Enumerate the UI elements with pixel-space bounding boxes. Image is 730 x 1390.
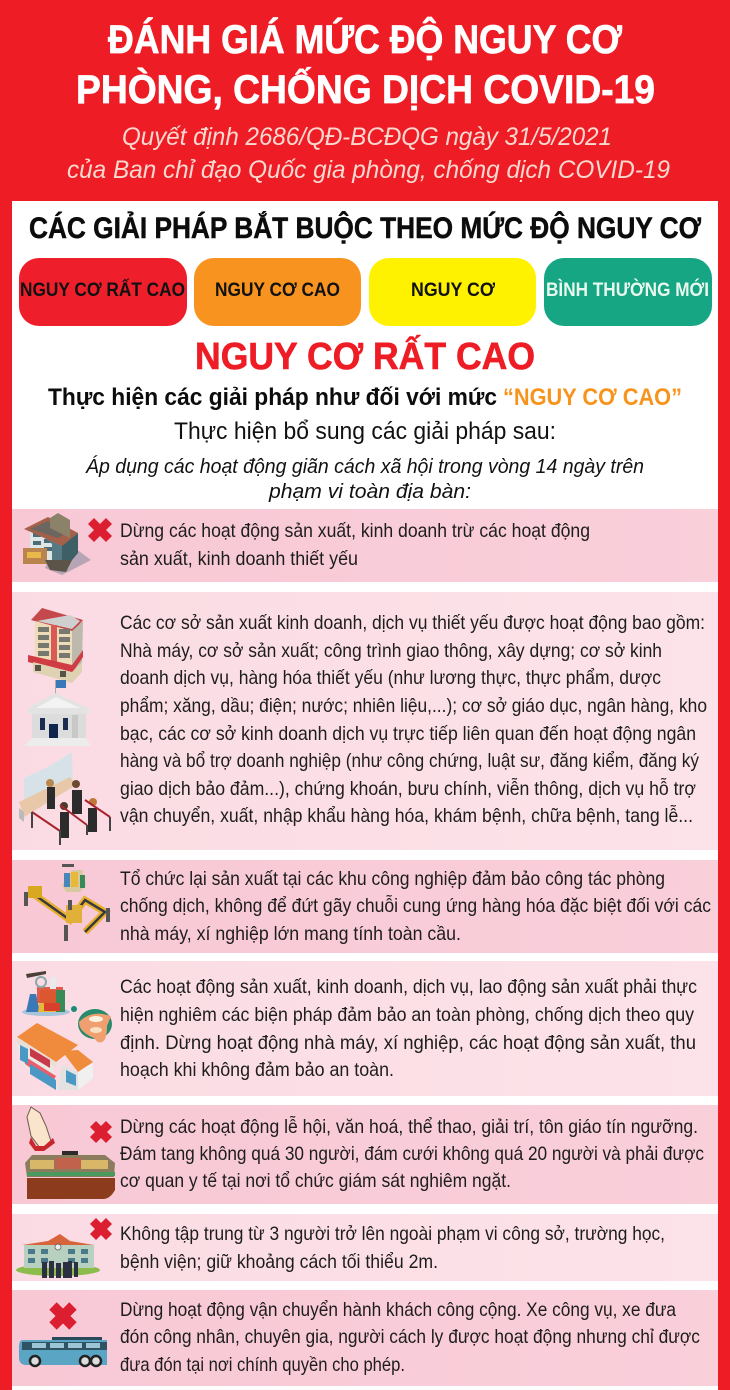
pill: risk: NGUY CƠ (411, 280, 496, 301)
pill: high risk: NGUY CƠ CAO (215, 280, 340, 301)
risk level pills (19, 258, 712, 326)
pill: new normal (544, 258, 712, 326)
panel: stop production (12, 509, 718, 582)
icon: red cross (53, 1306, 73, 1326)
body text: bệnh viện; giữ khoảng cách tối thiểu 2m. (120, 1251, 438, 1273)
body text: Dừng hoạt động vận chuyển hành khách công cộng. Xe công vụ, xe đưa (120, 1299, 676, 1321)
body text: hoạch khi không đảm bảo an toàn. (120, 1059, 394, 1081)
icon: building (23, 513, 91, 575)
body text: định. Dừng hoạt động nhà máy, xí nghiệp, các hoạt động sản xuất, thu (120, 1032, 696, 1054)
icon: bank (24, 680, 91, 746)
body text: đưa đón tại nơi chính quyền cho phép. (120, 1354, 405, 1376)
panel: stop festivals (12, 1105, 718, 1204)
body text (120, 976, 697, 1081)
level heading: NGUY CƠ RẤT CAO (195, 334, 535, 378)
body text: Tổ chức lại sản xuất tại các khu công nghiệp đảm bảo công tác phòng (120, 868, 665, 890)
pill: very high risk: NGUY CƠ RẤT CAO (20, 279, 185, 301)
instruction line: “NGUY CƠ CAO” (503, 384, 682, 411)
pill: very high risk (19, 258, 187, 326)
pill: risk (369, 258, 536, 326)
subtitle (67, 123, 670, 184)
body text (120, 520, 590, 570)
body text: nhà máy, xí nghiệp lớn mang tính toàn cầu. (120, 923, 461, 945)
italic note (85, 455, 644, 503)
body text: Nhà máy, cơ sở sản xuất; công trình giao thông, xây dựng; cơ sở kinh (120, 640, 662, 662)
icon: stadium with praying hands (25, 1107, 115, 1199)
icon: bus (19, 1337, 107, 1366)
icon: red cross (91, 521, 109, 539)
subtitle: của Ban chỉ đạo Quốc gia phòng, chống dịch COVID-19 (67, 156, 670, 184)
icon: washing hands (71, 1006, 112, 1042)
body text (120, 1299, 700, 1376)
supplementary line: Thực hiện bổ sung các giải pháp sau: (174, 418, 556, 445)
body text: cơ quan y tế tại nơi tổ chức giám sát nghiêm ngặt. (120, 1170, 511, 1192)
icon: service counter (19, 752, 110, 845)
pill: high risk (194, 258, 361, 326)
panel: no gatherings (12, 1214, 718, 1281)
body text: Dừng các hoạt động sản xuất, kinh doanh trừ các hoạt động (120, 520, 590, 542)
body text (120, 868, 711, 945)
body text (120, 1115, 704, 1192)
body text: doanh dịch vụ, hàng hóa thiết yếu (như lương thực, thực phẩm, dược (120, 667, 661, 689)
panel: essential establishments (12, 592, 718, 850)
title: ĐÁNH GIÁ MỨC ĐỘ NGUY CƠ (108, 16, 623, 62)
title: PHÒNG, CHỐNG DỊCH COVID-19 (76, 66, 655, 112)
icon: factory conveyor (24, 864, 110, 941)
icon: shop (17, 1023, 93, 1090)
italic note: phạm vi toàn địa bàn: (268, 481, 471, 503)
icon: red cross (93, 1221, 109, 1237)
body text: sản xuất, kinh doanh thiết yếu (120, 548, 358, 570)
icon: cleaning supplies (22, 971, 70, 1016)
panel: stop public transport (12, 1290, 718, 1386)
panel: safety measures (12, 961, 718, 1096)
icon: hotel (28, 608, 83, 683)
pill: new normal: BÌNH THƯỜNG MỚI (546, 279, 709, 301)
body text (120, 1223, 665, 1273)
icon: school with people (16, 1234, 100, 1278)
title (76, 16, 655, 112)
italic note: Áp dụng các hoạt động giãn cách xã hội trong vòng 14 ngày trên (85, 455, 644, 478)
instruction line: Thực hiện các giải pháp như đối với mức (48, 384, 497, 411)
body text: Không tập trung từ 3 người trở lên ngoài phạm vi công sở, trường học, (120, 1223, 665, 1245)
body text (120, 612, 707, 827)
icon: red cross (93, 1124, 109, 1140)
subtitle: Quyết định 2686/QĐ-BCĐQG ngày 31/5/2021 (122, 123, 612, 151)
panel: reorganise production (12, 860, 718, 953)
